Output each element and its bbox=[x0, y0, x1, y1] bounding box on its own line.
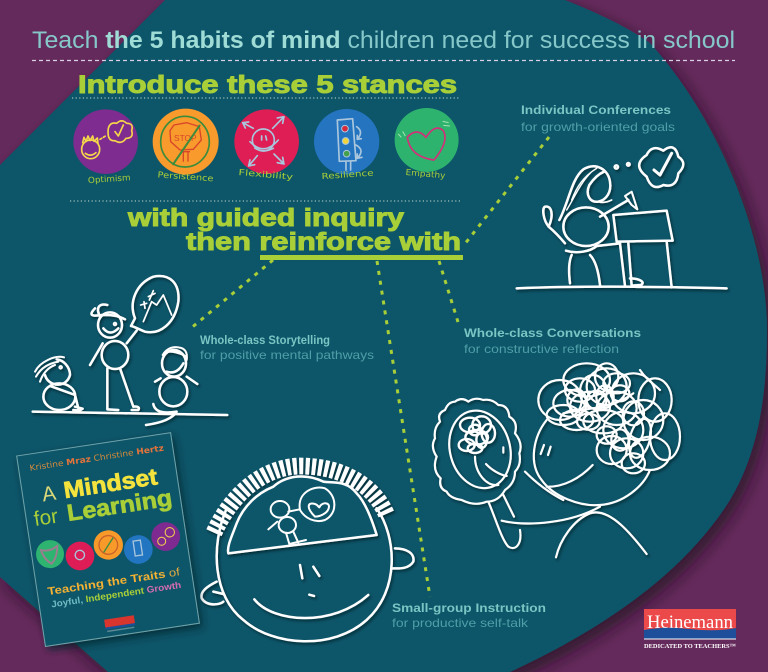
title: Teach the 5 habits of mind children need for success in school bbox=[32, 27, 735, 54]
heading: introduce stances: Introduce these 5 stances bbox=[78, 71, 457, 99]
book title bbox=[28, 462, 174, 531]
icon: optimism bbox=[73, 109, 138, 174]
icon: persistence: STOP bbox=[174, 133, 197, 143]
face bbox=[300, 565, 319, 596]
label: whole-class conversations: Whole-class Conversations bbox=[464, 328, 641, 340]
label: Flexibility: Flexibility bbox=[238, 167, 294, 182]
label: small-group instruction: Small-group Instruction bbox=[392, 603, 546, 615]
book stance circles bbox=[34, 520, 183, 579]
illustration: child with mirror bbox=[433, 363, 680, 557]
icon: empathy bbox=[395, 108, 459, 172]
book title: Learning bbox=[65, 484, 174, 526]
label: small-group instruction bbox=[392, 603, 546, 630]
book publisher logo bbox=[104, 615, 136, 632]
label: small-group instruction: for productive self-talk bbox=[392, 616, 529, 630]
label: whole-class storytelling bbox=[200, 335, 374, 362]
illustration: boy with open head bbox=[201, 466, 414, 641]
label: whole-class storytelling: Whole-class Storytelling bbox=[200, 335, 330, 347]
head bbox=[217, 508, 392, 641]
book title: Mindset bbox=[62, 463, 159, 503]
icon: resilience bbox=[314, 109, 379, 174]
underline bar bbox=[260, 255, 463, 260]
stance icons row bbox=[73, 108, 459, 185]
dashed connectors bbox=[190, 137, 549, 597]
book title: A bbox=[40, 482, 58, 506]
icon: flexibility bbox=[234, 109, 299, 174]
curly hair bbox=[538, 363, 680, 473]
illustration: student at desk bbox=[517, 147, 727, 288]
label: individual conferences: Individual Conferences bbox=[521, 105, 671, 117]
label: individual conferences: for growth-oriented goals bbox=[521, 120, 675, 134]
label: Resilience: Resilience bbox=[321, 168, 374, 181]
label: Optimism: Optimism bbox=[88, 172, 131, 185]
logo: Heinemann: Heinemann bbox=[647, 612, 733, 633]
illustration: storytelling kids bbox=[33, 276, 227, 425]
book subtitle: Teaching the Traits of bbox=[47, 566, 182, 598]
logo: Heinemann bbox=[644, 609, 736, 650]
book subtitle: Joyful, Independent Growth bbox=[51, 580, 182, 609]
book authors: Kristine Mraz Christine Hertz bbox=[29, 443, 165, 473]
label: whole-class conversations bbox=[464, 328, 641, 356]
book title: for bbox=[32, 505, 60, 531]
icon: persistence bbox=[153, 109, 219, 175]
book cover bbox=[17, 433, 199, 646]
label: Empathy: Empathy bbox=[405, 167, 446, 180]
logo: Heinemann: DEDICATED TO TEACHERS™ bbox=[644, 643, 736, 650]
hair bbox=[214, 466, 387, 533]
small figure bbox=[268, 488, 334, 544]
ears bbox=[201, 548, 414, 604]
label: whole-class storytelling: for positive mental pathways bbox=[200, 348, 374, 362]
label: Persistence: Persistence bbox=[157, 169, 214, 183]
label: individual conferences bbox=[521, 105, 675, 134]
mirror bbox=[433, 399, 521, 548]
heading: then reinforce with: then reinforce with bbox=[186, 228, 461, 256]
head and body bbox=[502, 420, 650, 557]
label: whole-class conversations: for constructive reflection bbox=[464, 342, 619, 356]
heading: with guided inquiry: with guided inquiry bbox=[127, 204, 404, 232]
